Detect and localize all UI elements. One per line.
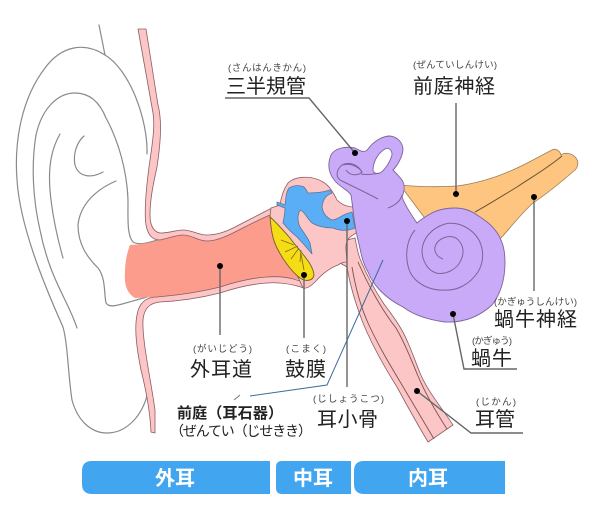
cochlea spiral (407, 223, 483, 290)
bar: inner ear: 内耳 (408, 467, 448, 490)
label: semicircular canals (226, 63, 306, 98)
label: Eustachian tube (475, 397, 516, 431)
label: vestibule: 前庭（耳石器） (177, 404, 283, 422)
label: vestibule (170, 404, 312, 439)
bar: outer ear: 外耳 (155, 467, 195, 490)
label: external auditory canal: (がいじどう) (193, 343, 252, 355)
label: Eustachian tube: 耳管 (475, 408, 515, 431)
label: vestibular nerve: (ぜんていしんけい) (413, 60, 497, 71)
label: cochlea (471, 335, 512, 370)
label: cochlear nerve: (かぎゅうしんけい) (494, 296, 577, 308)
label: cochlea: 蝸牛 (471, 347, 512, 370)
skin layer: upper wall (138, 29, 275, 241)
label: eardrum: 鼓膜 (285, 358, 326, 381)
label: vestibular nerve: 前庭神経 (413, 75, 495, 98)
label: ossicles (313, 394, 384, 431)
label: cochlear nerve (494, 296, 577, 331)
label: cochlea: (かぎゅう) (472, 335, 512, 347)
skin layer: lower wall (136, 277, 304, 433)
label: semicircular canals: 三半規管 (226, 75, 306, 98)
Eustachian tube (340, 238, 453, 442)
bar: inner ear (354, 461, 505, 494)
label: cochlear nerve: 蝸牛神経 (494, 308, 577, 331)
vestibule, semicircular canals and cochlea (329, 136, 505, 322)
label: semicircular canals: (さんはんきかん) (228, 63, 306, 74)
vestibular and cochlear nerves (400, 149, 578, 238)
middle ear cavity (270, 177, 358, 288)
bar: outer ear (82, 461, 270, 494)
label: vestibule: （ぜんてい（じせきき） (170, 423, 312, 439)
label: eardrum (285, 344, 326, 381)
leader lines and dots (217, 98, 537, 433)
label: vestibular nerve (413, 60, 497, 98)
outer ear outline (16, 25, 158, 433)
ossicles (277, 186, 355, 254)
label: external auditory canal (190, 343, 252, 381)
label: eardrum: (こまく) (286, 344, 326, 355)
label: Eustachian tube: (じかん) (476, 397, 516, 408)
bar: middle ear (276, 461, 351, 494)
label: ossicles: 耳小骨 (317, 408, 378, 431)
bar: middle ear: 中耳 (293, 467, 333, 490)
eardrum (270, 217, 314, 280)
label: external auditory canal: 外耳道 (190, 358, 252, 381)
label: ossicles: (じしょうこつ) (313, 394, 384, 405)
ear canal (125, 215, 300, 298)
